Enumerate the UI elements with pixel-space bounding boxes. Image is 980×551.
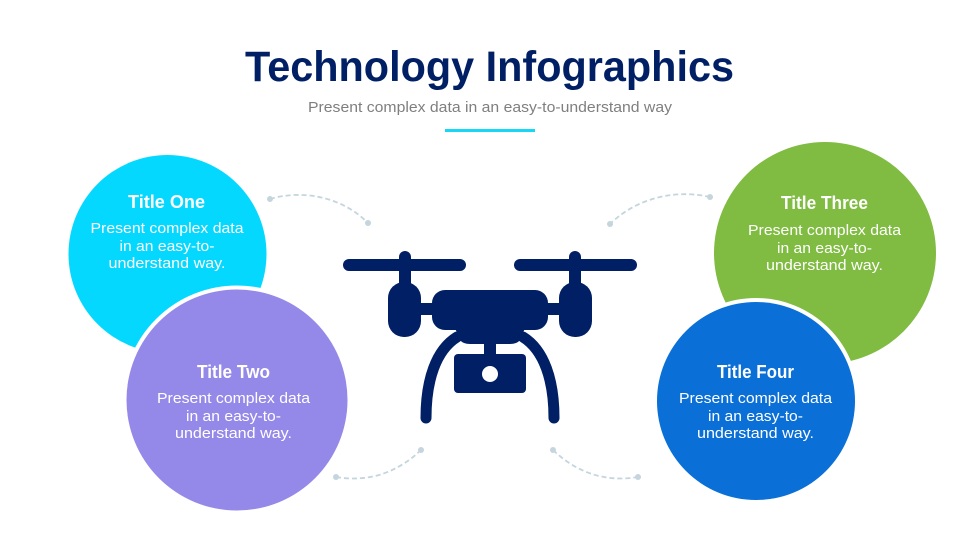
text: title four body: Present complex data	[679, 391, 833, 407]
connector: title two to drone	[333, 447, 424, 480]
heading: title four: Title Four	[717, 362, 794, 382]
panel: title one	[68, 155, 266, 353]
text: title one body	[90, 221, 245, 272]
circle: title one	[68, 155, 266, 353]
connector: title one to drone	[267, 195, 371, 226]
text: title three body: understand way.	[766, 258, 883, 274]
circle: title two	[126, 290, 348, 510]
text: title one body: understand way.	[108, 256, 226, 272]
text: title three body: Present complex data	[748, 223, 902, 239]
text: title one body: Present complex data	[90, 221, 245, 237]
text: title two body: Present complex data	[157, 391, 311, 407]
heading: title two: Title Two	[197, 362, 270, 382]
text: title four body: in an easy-to-	[708, 409, 803, 425]
heading: title one: Title One	[128, 192, 205, 212]
text: title two body: in an easy-to-	[186, 409, 281, 425]
text: title four body: understand way.	[697, 426, 814, 442]
text: title four body	[679, 391, 833, 442]
panel: title two	[126, 290, 348, 510]
icon: drone	[343, 251, 637, 418]
subtitle: Present complex data in an easy-to-understand way	[308, 99, 673, 116]
text: title two body	[157, 391, 311, 442]
title underline	[445, 129, 535, 132]
title: Technology Infographics	[245, 43, 734, 91]
circle: title four	[657, 302, 855, 500]
heading: title three: Title Three	[781, 193, 868, 213]
text: title two body: understand way.	[175, 426, 292, 442]
panel: title three	[714, 142, 936, 364]
panel: title four	[657, 302, 855, 500]
text: title three body: in an easy-to-	[777, 241, 872, 257]
connector: title three to drone	[607, 194, 713, 227]
text: title three body	[748, 223, 902, 274]
connector: title four to drone	[550, 447, 641, 480]
circle: title three	[714, 142, 936, 364]
text: title one body: in an easy-to-	[120, 239, 215, 255]
